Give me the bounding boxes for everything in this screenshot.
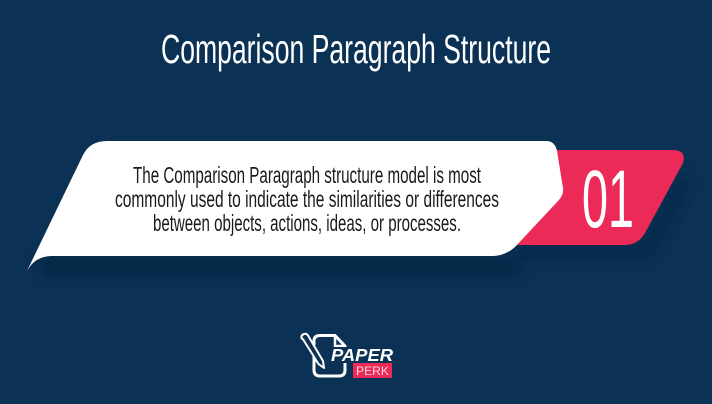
card text: The Comparison Paragraph structure model is most [133, 162, 481, 188]
logo [301, 334, 393, 378]
number: 01 [582, 154, 634, 245]
card text: commonly used to indicate the similarities or differences [115, 186, 499, 212]
logo badge text: PERK [356, 364, 389, 378]
icon: page fold [335, 336, 345, 346]
white text card [27, 141, 563, 271]
logo: PAPER [331, 345, 393, 365]
icon: paper sheet [314, 336, 345, 376]
card text: between objects, actions, ideas, or processes. [153, 210, 461, 236]
logo badge [353, 363, 392, 378]
icon: pencil [301, 334, 324, 368]
logo wordmark [329, 347, 347, 363]
banner shadow [36, 165, 688, 278]
number tab [500, 150, 684, 245]
card text [115, 162, 499, 236]
banner [27, 141, 688, 278]
